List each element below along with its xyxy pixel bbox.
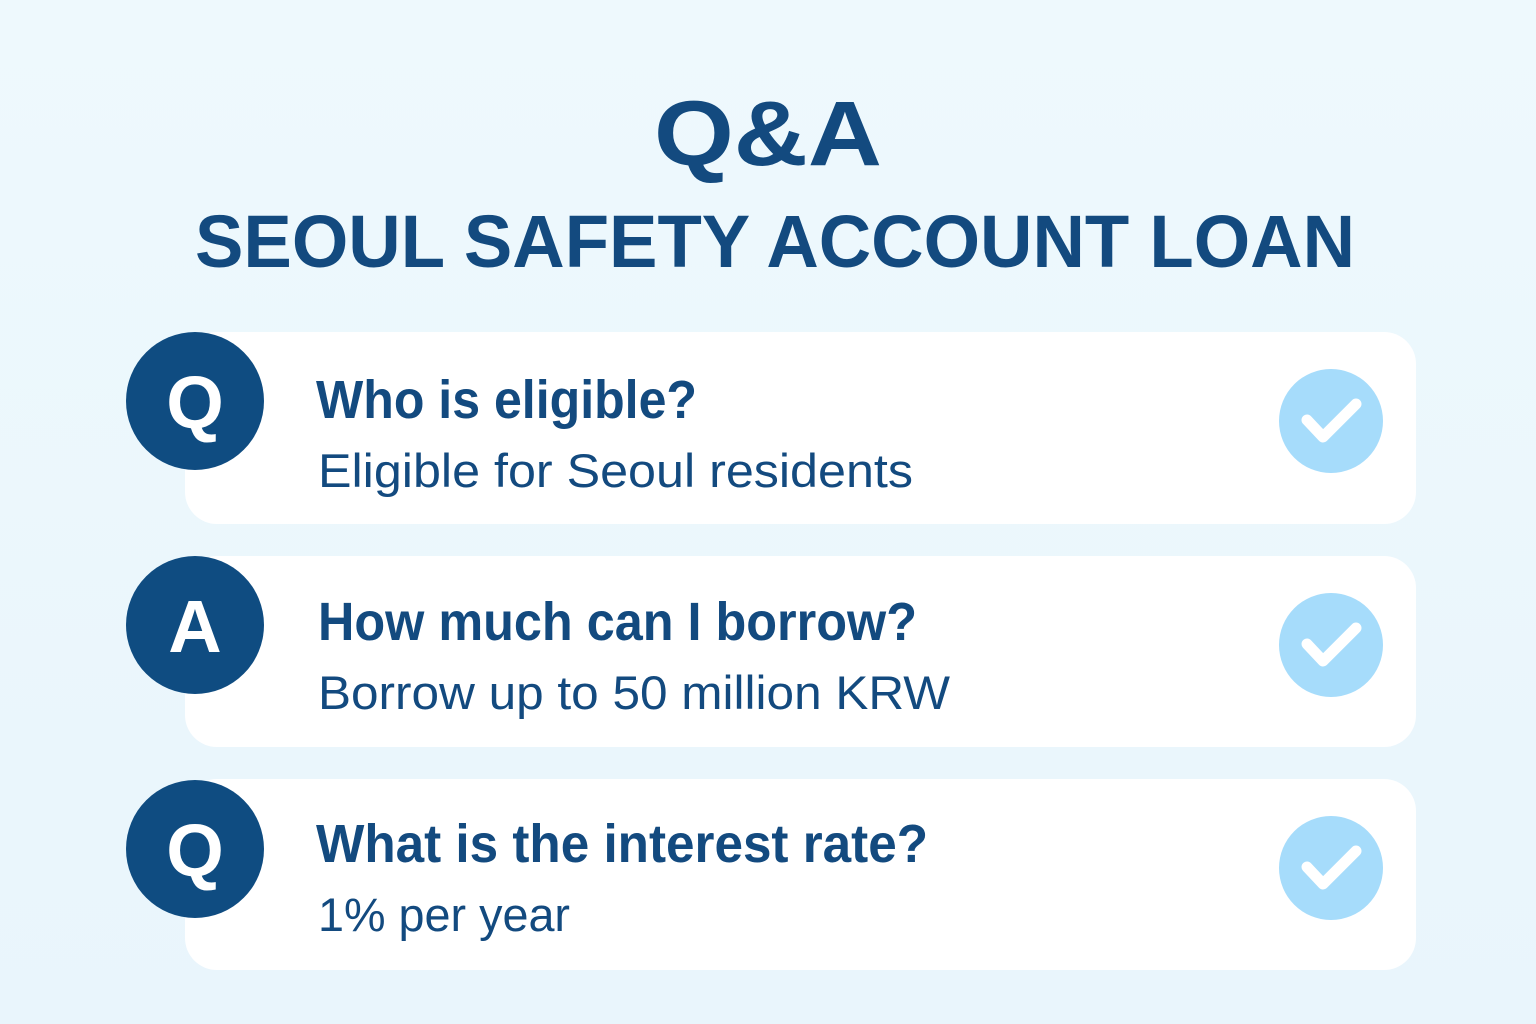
answer text: 1% per year xyxy=(318,888,570,941)
title: Q&A xyxy=(654,83,882,185)
question text: How much can I borrow? xyxy=(318,592,917,652)
icon: check xyxy=(1279,369,1383,473)
panel: eligibility xyxy=(126,332,1416,524)
icon: Q badge xyxy=(126,332,264,470)
icon: Q badge: Q xyxy=(166,361,224,444)
question text: What is the interest rate? xyxy=(316,814,928,874)
icon: check xyxy=(1279,593,1383,697)
question text: Who is eligible? xyxy=(316,370,697,430)
panel: interest xyxy=(126,779,1416,970)
icon: Q badge: Q xyxy=(166,809,224,892)
answer text: Eligible for Seoul residents xyxy=(318,444,913,497)
icon: Q badge xyxy=(126,780,264,918)
icon: A badge xyxy=(126,556,264,694)
panel: amount xyxy=(126,556,1416,747)
icon: A badge: A xyxy=(168,585,222,668)
subtitle: SEOUL SAFETY ACCOUNT LOAN xyxy=(195,200,1355,283)
icon: check xyxy=(1279,816,1383,920)
answer text: Borrow up to 50 million KRW xyxy=(318,666,951,719)
